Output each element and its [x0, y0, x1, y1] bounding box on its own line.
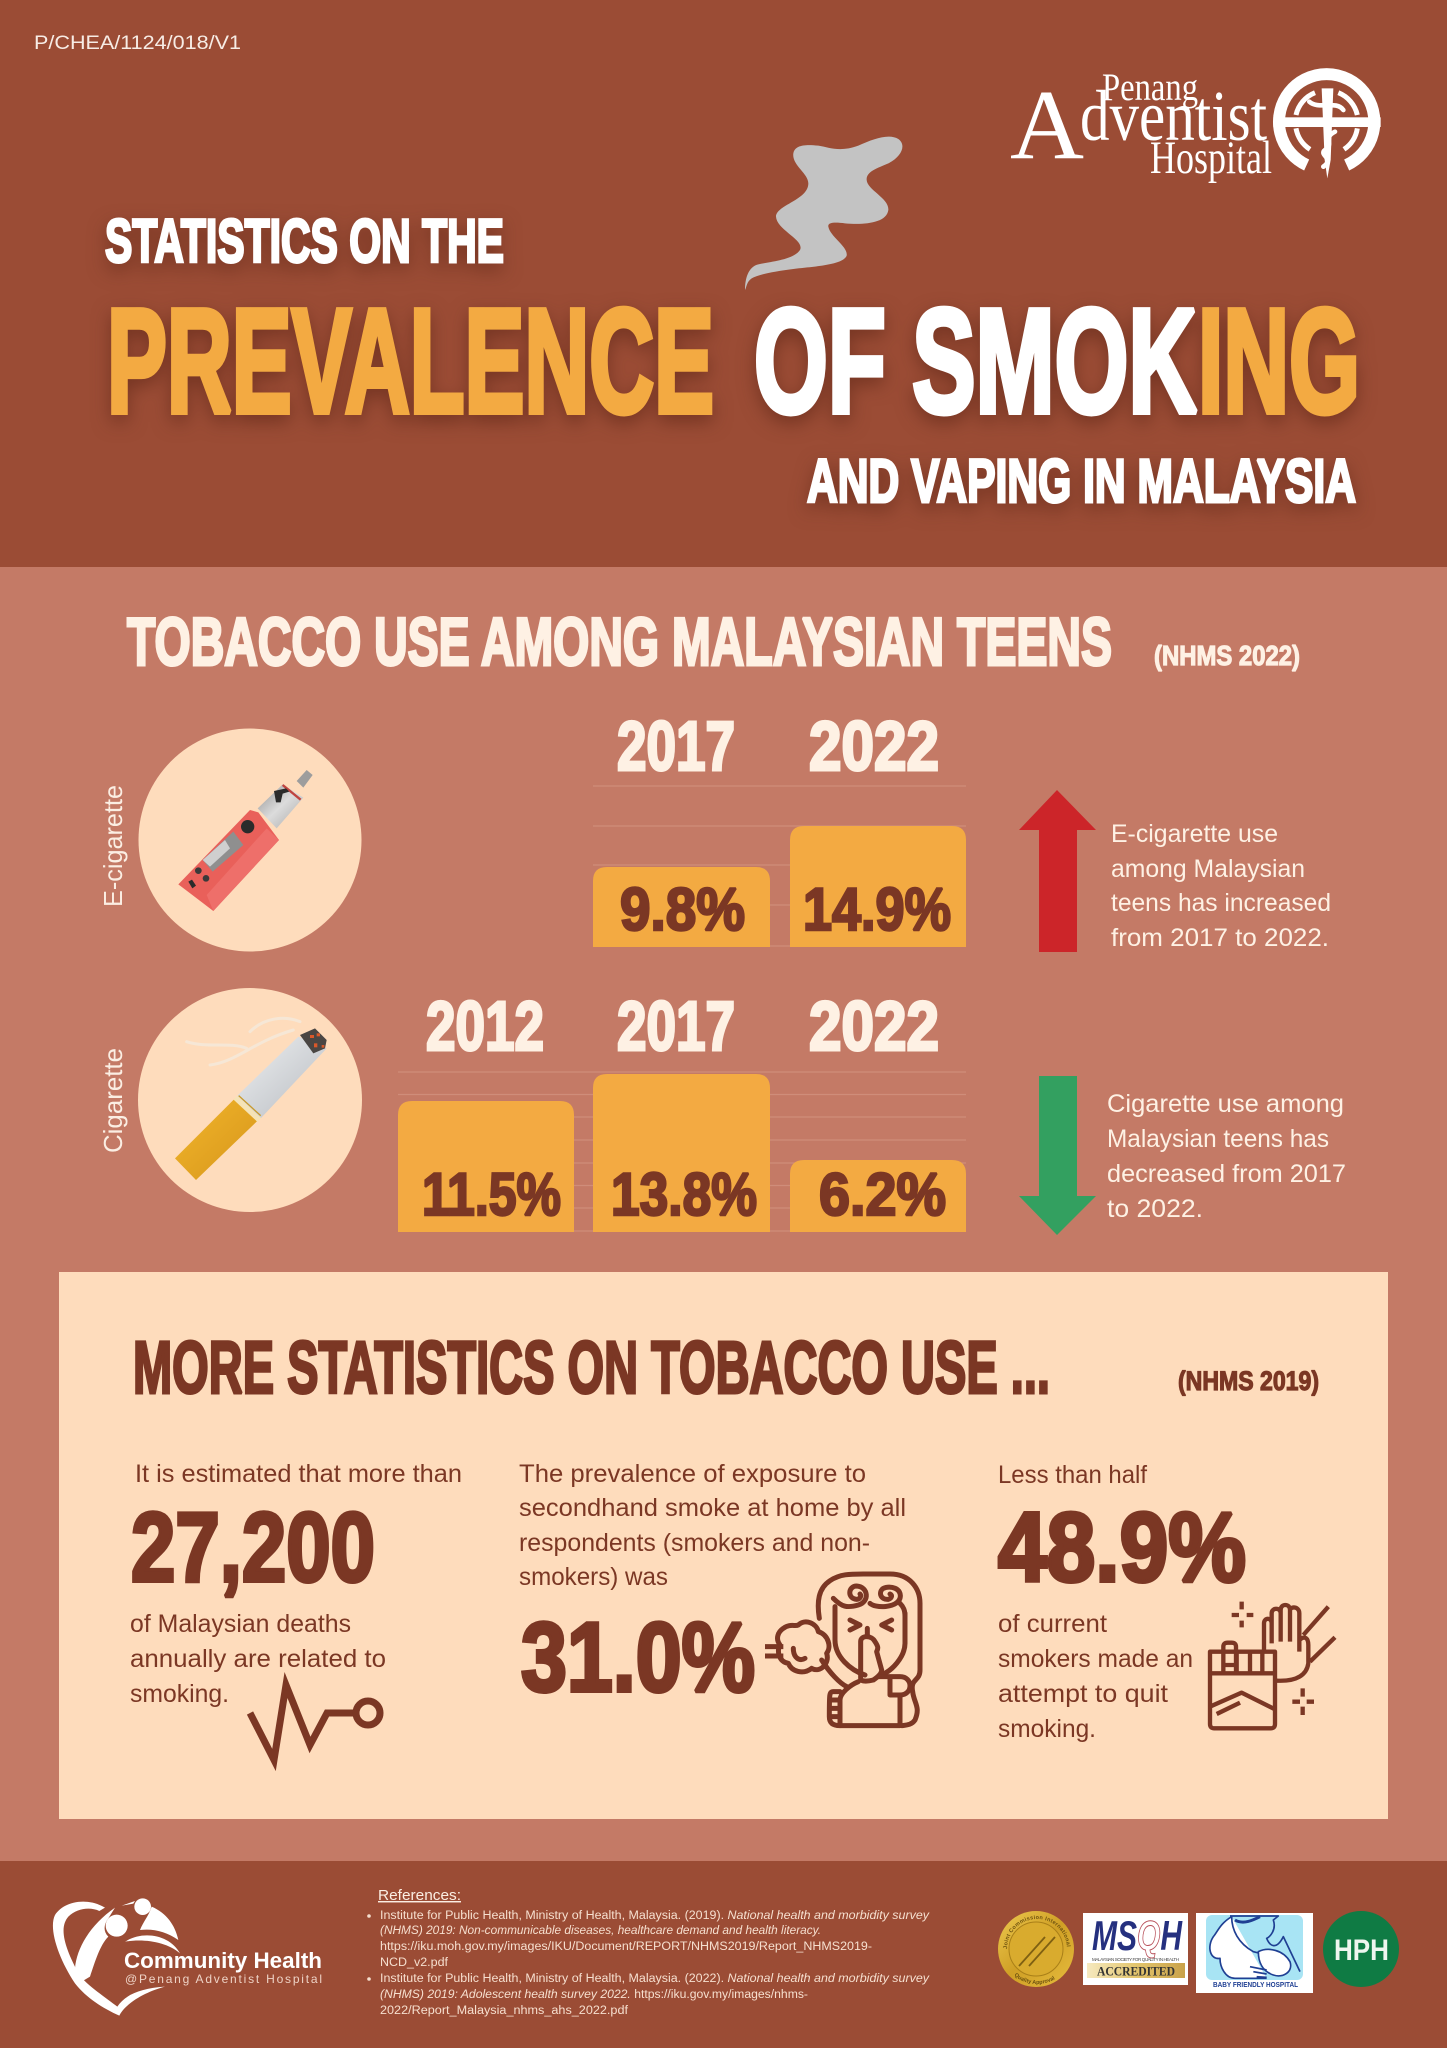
- year label 2017: 2017: [617, 987, 735, 1065]
- bar: 2022 e-cigarette: [790, 826, 966, 947]
- stat: deaths: of Malaysian deaths: [130, 1610, 351, 1638]
- icon: pulse line: [250, 1685, 380, 1760]
- badge: MSQH accredited: [1083, 1912, 1188, 1985]
- icon: cigarette: [138, 988, 362, 1212]
- text: cigarette decrease: [1107, 1090, 1346, 1223]
- title word: prevalence: PREVALENCE: [107, 279, 714, 444]
- badge: MSQH accredited: ACCREDITED: [1097, 1964, 1175, 1978]
- label: e-cigarette: E-cigarette: [98, 785, 128, 907]
- stat: secondhand smoke: The prevalence of exposure to: [519, 1460, 866, 1488]
- stat: quit attempts: of current: [998, 1610, 1107, 1638]
- icon: e-cigarette: [138, 728, 362, 952]
- logo: Penang Adventist Hospital: [1010, 66, 1381, 184]
- arrow: up red: [1019, 790, 1096, 952]
- icon: smoke: [745, 137, 902, 290]
- logo: Penang Adventist Hospital: dventist: [1080, 76, 1267, 156]
- bullet: reference 1: Institute for Public Health, Ministry of Health, Malaysia. (2019). National health and morbidity survey: [380, 1910, 930, 1922]
- bar: 2017 e-cigarette: 9.8%: [620, 876, 745, 943]
- panel: footer: [0, 1861, 1447, 2048]
- badge: baby friendly hospital: BABY FRIENDLY HOSPITAL: [1213, 1980, 1298, 1989]
- bullet: reference 2: (NHMS) 2019: Adolescent health survey 2022. https://iku.gov.my/images/nhms-: [380, 1989, 808, 2001]
- stat: quit attempts: [998, 1461, 1335, 1743]
- text: cigarette decrease: Malaysian teens has: [1107, 1125, 1329, 1153]
- year label 2022: 2022: [809, 707, 939, 785]
- document code: P/CHEA/1124/018/V1: [34, 33, 241, 54]
- bullet: reference 2: Institute for Public Health, Ministry of Health, Malaysia. (2022). National health and morbidity survey: [380, 1973, 930, 1985]
- chart: e-cigarette bars: [593, 707, 966, 947]
- bar: 2017 cigarette: 13.8%: [611, 1161, 757, 1228]
- text: e-cigarette increase: E-cigarette use: [1111, 820, 1278, 848]
- badge: baby friendly hospital: [1196, 1913, 1313, 1993]
- text: cigarette decrease: decreased from 2017: [1107, 1160, 1346, 1188]
- bullet: reference 2: [367, 1973, 930, 2017]
- references: [367, 1888, 930, 2017]
- stat: secondhand smoke: respondents (smokers and non-: [519, 1529, 870, 1557]
- stat: quit attempts: smoking.: [998, 1715, 1096, 1743]
- text: e-cigarette increase: from 2017 to 2022.: [1111, 924, 1329, 952]
- bar: 2012 cigarette: 11.5%: [422, 1161, 561, 1228]
- stat: secondhand smoke: smokers) was: [519, 1563, 668, 1591]
- references: References:: [378, 1888, 461, 1904]
- logo: community health: @Penang Adventist Hospital: [125, 1972, 322, 1986]
- panel: header: [0, 0, 1447, 567]
- stat: deaths: smoking.: [130, 1680, 229, 1708]
- logo: community health: Community Health: [124, 1948, 322, 1973]
- logo: Penang Adventist Hospital: Penang: [1102, 66, 1198, 109]
- year label 2017: 2017: [617, 707, 735, 785]
- stat: quit attempts: attempt to quit: [998, 1680, 1168, 1708]
- stat: deaths: [130, 1460, 462, 1760]
- stat: deaths: It is estimated that more than: [135, 1460, 462, 1488]
- bar: 2017 cigarette: [593, 1074, 770, 1232]
- badge: HPH: [1323, 1911, 1399, 1987]
- bullet: reference 2: 2022/Report_Malaysia_nhms_ahs_2022.pdf: [380, 2005, 629, 2017]
- row: cigarette: [98, 987, 1346, 1235]
- stat: deaths: annually are related to: [130, 1645, 386, 1673]
- arrow: down green: [1019, 1076, 1096, 1235]
- title: [105, 207, 1360, 515]
- icon: person covering nose from smoke: [765, 1574, 920, 1726]
- source note: (NHMS 2022): [1154, 640, 1300, 671]
- chart: cigarette bars: [398, 987, 966, 1232]
- year label 2022: 2022: [809, 987, 939, 1065]
- text: e-cigarette increase: [1111, 820, 1331, 952]
- panel: tobacco use among teens: [98, 604, 1346, 1235]
- panel: more statistics: [59, 1272, 1388, 1819]
- bar: 2012 cigarette: [398, 1101, 574, 1232]
- logo: community health: [53, 1898, 322, 2016]
- text: e-cigarette increase: among Malaysian: [1111, 855, 1305, 883]
- bar: 2022 cigarette: 6.2%: [819, 1161, 946, 1228]
- icon: hospital seal: [1273, 74, 1381, 178]
- source note: (NHMS 2019): [1178, 1366, 1319, 1396]
- bullet: reference 1: NCD_v2.pdf: [380, 1957, 449, 1969]
- badge: joint commission gold seal: Joint Commission International: [1003, 1915, 1071, 1949]
- stat: secondhand smoke: secondhand smoke at home by all: [519, 1494, 906, 1522]
- number: 48.9%: 48.9%: [998, 1492, 1246, 1602]
- logo: Penang Adventist Hospital: A: [1010, 69, 1084, 180]
- badge: joint commission gold seal: Quality Approval: [1015, 1973, 1055, 1986]
- text: cigarette decrease: Cigarette use among: [1107, 1090, 1344, 1118]
- badge: MSQH accredited: MSQH: [1092, 1912, 1183, 1960]
- stat: secondhand smoke: [519, 1460, 920, 1726]
- stat: quit attempts: Less than half: [998, 1461, 1147, 1489]
- number: 31.0%: 31.0%: [521, 1602, 755, 1712]
- badge: HPH: HPH: [1334, 1934, 1389, 1967]
- text: e-cigarette increase: teens has increased: [1111, 889, 1331, 917]
- stat: quit attempts: smokers made an: [998, 1645, 1193, 1673]
- row: e-cigarette: [98, 707, 1331, 952]
- bar: 2022 e-cigarette: 14.9%: [803, 876, 951, 943]
- badge: joint commission gold seal: [998, 1911, 1074, 1987]
- year label 2012: 2012: [426, 987, 544, 1065]
- text: cigarette decrease: to 2022.: [1107, 1195, 1203, 1223]
- bar: 2017 e-cigarette: [593, 867, 770, 947]
- bullet: reference 1: [367, 1910, 930, 1969]
- icon: hand refusing cigarette pack: [1210, 1602, 1335, 1728]
- title line: statistics on the: STATISTICS ON THE: [105, 207, 504, 275]
- bullet: reference 1: (NHMS) 2019: Non-communicable diseases, healthcare demand and health literacy.: [380, 1925, 821, 1937]
- logo: Penang Adventist Hospital: Hospital: [1150, 132, 1272, 184]
- title word: of smok: OF SMOK: [754, 279, 1197, 444]
- badge: MSQH accredited: MALAYSIAN SOCIETY FOR QUALITY IN HEALTH: [1092, 1957, 1179, 1962]
- number: 27,200: 27,200: [131, 1492, 375, 1602]
- bullet: reference 1: https://iku.moh.gov.my/images/IKU/Document/REPORT/NHMS2019/Report_NHMS2019-: [380, 1941, 872, 1953]
- label: cigarette: Cigarette: [98, 1048, 128, 1153]
